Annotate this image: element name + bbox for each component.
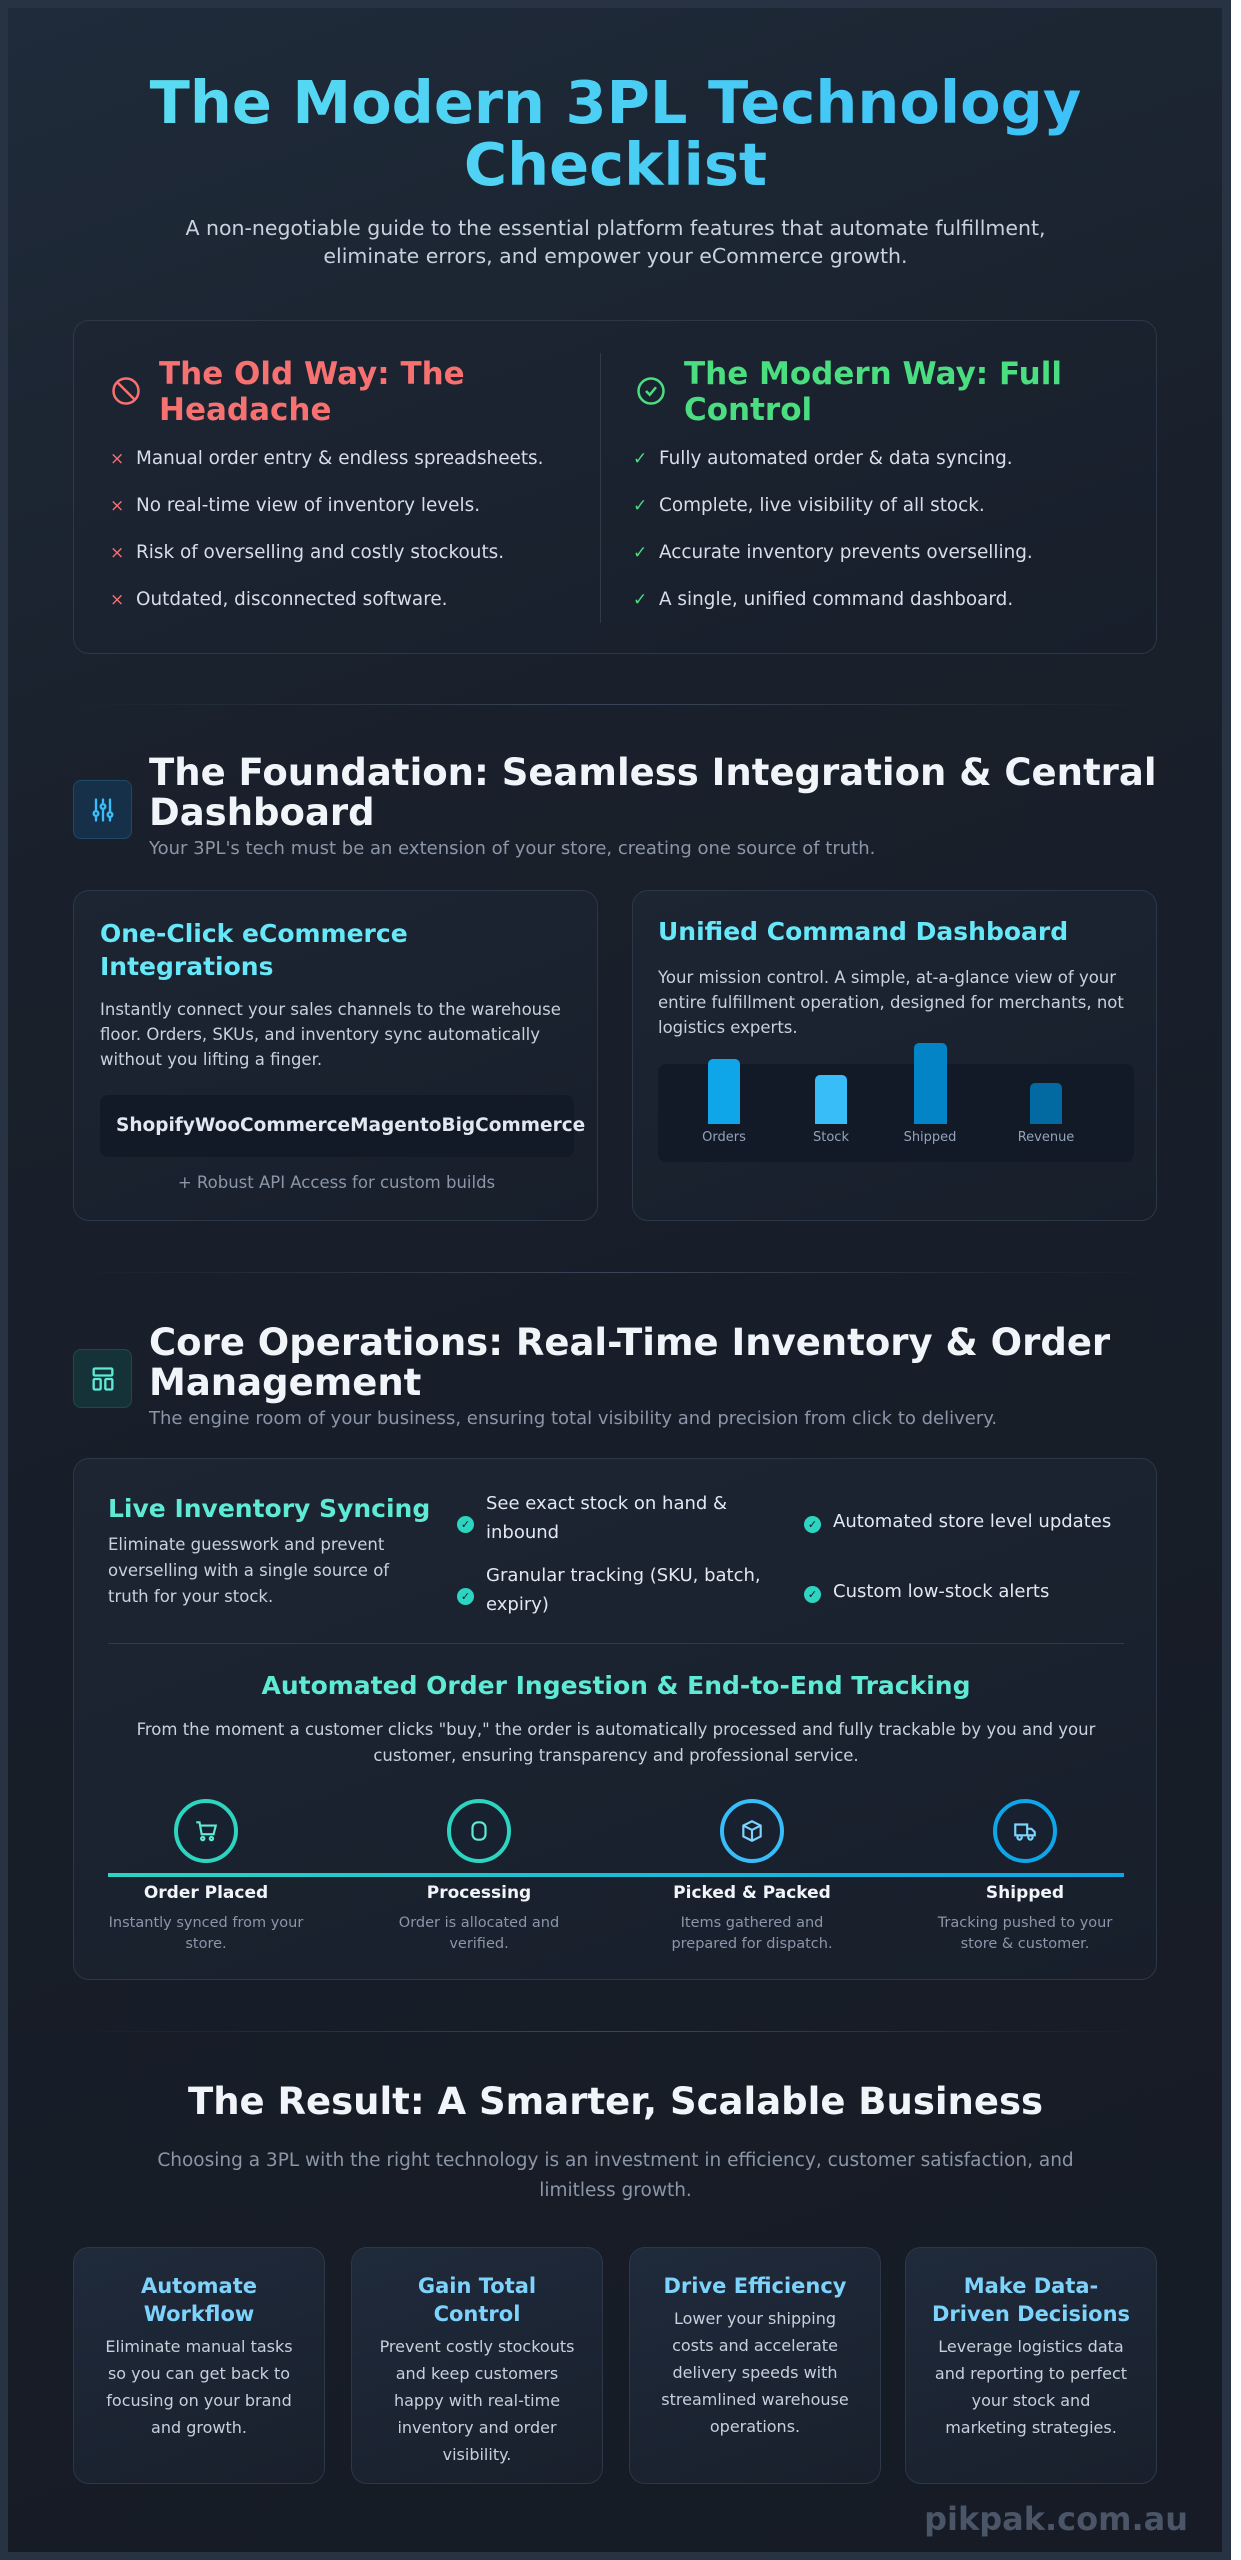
bar chart — [658, 1064, 1134, 1162]
card: dashboard: Your mission control. A simple, at-a-glance view of your entire fulfillment operation, designed for merchants, not logistics experts. — [658, 968, 1124, 1037]
timeline: Order is allocated and — [399, 1915, 559, 1931]
heading: foundation: The Foundation: Seamless Integration & Central — [149, 751, 1157, 794]
list: old way: × — [110, 543, 124, 563]
checklist: inbound — [486, 1522, 559, 1543]
list: old way: × — [110, 590, 124, 610]
heading: result: The Result: A Smarter, Scalable Business — [188, 2080, 1043, 2123]
card: integrations: Integrations — [100, 952, 273, 981]
logos strip — [100, 1095, 574, 1157]
heading: modern way: The Modern Way: Full — [684, 356, 1062, 392]
subtitle: result: limitless growth. — [539, 2180, 692, 2201]
card: gain total control — [351, 2247, 603, 2484]
card: drive efficiency: Drive Efficiency — [664, 2274, 846, 2298]
card: gain total control: Control — [434, 2302, 520, 2326]
subtitle: A non-negotiable guide to the essential platform features that automate fulfillment, — [185, 216, 1046, 240]
list: old way: Risk of overselling and costly stockouts. — [136, 542, 504, 563]
heading: old way: The Old Way: The — [159, 356, 465, 392]
heading: foundation — [149, 751, 1157, 834]
card: integrations — [73, 890, 598, 1221]
title: The Modern 3PL Technology — [150, 68, 1081, 137]
checklist: Granular tracking (SKU, batch, — [486, 1565, 761, 1586]
icon: sliders — [73, 780, 132, 839]
card: integrations: Instantly connect your sales channels to the warehouse floor. Orders, SKUs, and inventory sync automatically without you lifting a finger. — [100, 1000, 561, 1069]
card: dashboard: Unified Command Dashboard — [658, 917, 1068, 946]
card: automate workflow: Automate — [141, 2274, 257, 2298]
card: automate workflow — [73, 2247, 325, 2484]
title — [0, 72, 1231, 196]
list: modern way: Fully automated order & data syncing. — [659, 448, 1013, 469]
list: old way — [110, 448, 543, 610]
divider — [600, 353, 601, 623]
panel: core operations: customer, ensuring transparency and professional service. — [373, 1746, 859, 1765]
list: modern way — [633, 448, 1033, 610]
heading: core operations: Core Operations: Real-Time Inventory & Order — [149, 1321, 1110, 1364]
bar chart: Shipped — [904, 1130, 956, 1145]
subtitle — [185, 216, 1046, 268]
heading: core operations — [149, 1321, 1110, 1404]
timeline: Items gathered and — [681, 1915, 823, 1931]
list: modern way: ✓ — [633, 543, 647, 563]
card: data-driven: Leverage logistics data and reporting to perfect your stock and marketing strategies. — [935, 2337, 1127, 2437]
timeline: prepared for dispatch. — [671, 1936, 833, 1952]
timeline: store & customer. — [961, 1936, 1089, 1952]
checklist: ✓ — [808, 1588, 817, 1601]
heading: order ingestion: Automated Order Ingestion & End-to-End Tracking — [261, 1671, 971, 1700]
timeline: Tracking pushed to your — [938, 1915, 1112, 1931]
list: modern way: ✓ — [633, 590, 647, 610]
card: integrations: One-Click eCommerce — [100, 919, 408, 948]
icon: check circle — [637, 377, 665, 405]
list: modern way: ✓ — [633, 496, 647, 516]
timeline: Picked & Packed — [673, 1883, 831, 1903]
list: old way: Outdated, disconnected software. — [136, 589, 448, 610]
heading: modern way — [684, 356, 1062, 428]
checklist: expiry) — [486, 1594, 549, 1615]
subtitle: core: The engine room of your business, ensuring total visibility and precision from click to delivery. — [149, 1408, 997, 1429]
card: drive efficiency: Lower your shipping costs and accelerate delivery speeds with streamlined warehouse operations. — [661, 2309, 849, 2436]
subtitle: result: Choosing a 3PL with the right technology is an investment in efficiency, customer satisfaction, and — [157, 2150, 1074, 2171]
bar chart: Orders — [702, 1130, 746, 1145]
panel: core operations — [73, 1458, 1157, 1980]
checklist: Custom low-stock alerts — [833, 1581, 1049, 1602]
checklist: ✓ — [808, 1518, 817, 1531]
bar chart: Revenue — [1018, 1130, 1074, 1145]
heading: core operations: Management — [149, 1361, 421, 1404]
list: modern way: ✓ — [633, 449, 647, 469]
card: automate workflow: Eliminate manual tasks so you can get back to focusing on your brand and growth. — [105, 2337, 293, 2437]
checklist: ✓ — [461, 1518, 470, 1531]
list: old way: No real-time view of inventory levels. — [136, 495, 480, 516]
heading: foundation: Dashboard — [149, 791, 375, 834]
list: modern way: A single, unified command dashboard. — [659, 589, 1013, 610]
panel: core operations: Eliminate guesswork and prevent overselling with a single source of truth for your stock. — [108, 1535, 389, 1606]
title: Checklist — [464, 130, 767, 199]
timeline: Order Placed — [144, 1883, 268, 1903]
card: integrations: + Robust API Access for custom builds — [178, 1173, 495, 1192]
card: data-driven — [905, 2247, 1157, 2484]
card: data-driven: Driven Decisions — [932, 2302, 1130, 2326]
card: dashboard — [632, 890, 1157, 1221]
logos strip: ShopifyWooCommerceMagentoBigCommerce — [116, 1115, 585, 1136]
subtitle: result — [157, 2150, 1074, 2201]
card: automate workflow: Workflow — [144, 2302, 254, 2326]
checklist: Automated store level updates — [833, 1511, 1111, 1532]
list: old way: × — [110, 449, 124, 469]
subtitle: foundation: Your 3PL's tech must be an extension of your store, creating one source of truth. — [149, 838, 875, 859]
card: gain total control: Gain Total — [418, 2274, 536, 2298]
icon: prohibited — [112, 377, 140, 405]
panel: old vs modern — [73, 320, 1157, 654]
checklist — [457, 1493, 1111, 1615]
timeline — [108, 1799, 1124, 1952]
watermark: pikpak.com.au — [924, 2500, 1188, 2538]
card: gain total control: Prevent costly stockouts and keep customers happy with real-time inventory and order visibility. — [380, 2337, 574, 2464]
heading: old way — [159, 356, 465, 428]
icon: layout — [73, 1349, 132, 1408]
timeline: store. — [185, 1936, 227, 1952]
live inventory: Live Inventory Syncing — [108, 1494, 430, 1523]
card: data-driven: Make Data- — [964, 2274, 1098, 2298]
timeline: Shipped — [986, 1883, 1064, 1903]
list: old way: × — [110, 496, 124, 516]
timeline: Processing — [427, 1883, 531, 1903]
checklist: ✓ — [461, 1590, 470, 1603]
card: drive efficiency — [629, 2247, 881, 2484]
timeline: verified. — [449, 1936, 509, 1952]
checklist: See exact stock on hand & — [486, 1493, 727, 1514]
heading: modern way: Control — [684, 392, 812, 428]
timeline: Instantly synced from your — [109, 1915, 303, 1931]
bar chart: Stock — [813, 1130, 849, 1145]
panel: core operations: From the moment a customer clicks "buy," the order is automatically processed and fully trackable by you and your — [137, 1720, 1095, 1739]
heading: old way: Headache — [159, 392, 331, 428]
list: modern way: Complete, live visibility of all stock. — [659, 495, 985, 516]
list: modern way: Accurate inventory prevents overselling. — [659, 542, 1033, 563]
subtitle: eliminate errors, and empower your eCommerce growth. — [323, 244, 908, 268]
list: old way: Manual order entry & endless spreadsheets. — [136, 448, 543, 469]
